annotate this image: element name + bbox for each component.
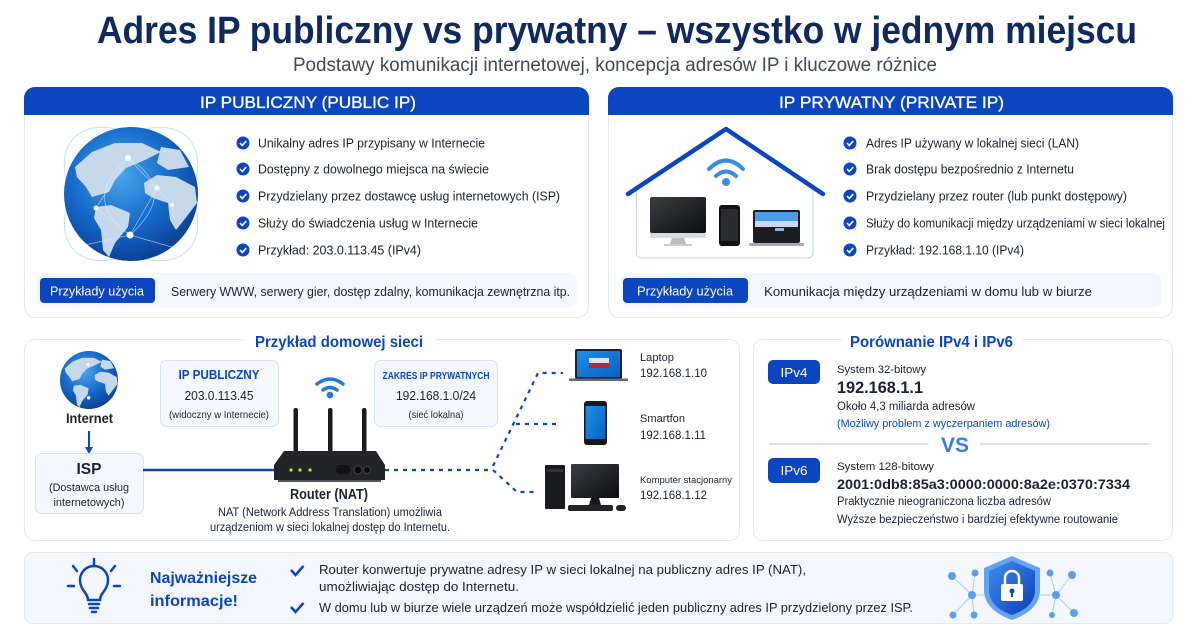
feature list: private IP xyxy=(844,136,1165,258)
feature list: public IP: Służy do świadczenia usług w Internecie xyxy=(258,216,478,230)
device label: desktop: Komputer stacjonarny xyxy=(640,475,732,486)
box: private IP range: ZAKRES IP PRYWATNYCH xyxy=(382,371,490,382)
usage strip: private IP xyxy=(620,273,1162,308)
panel: IPv4 vs IPv6 comparison xyxy=(754,334,1172,540)
device label: smartphone xyxy=(640,413,706,442)
feature list: public IP xyxy=(236,136,560,258)
icon: house with devices xyxy=(628,129,823,258)
text: IPv4 details xyxy=(837,364,1050,430)
arrow: Internet to ISP xyxy=(85,431,93,454)
device label: smartphone: 192.168.1.11 xyxy=(640,428,706,442)
box: ISP xyxy=(36,454,144,514)
feature list: private IP: Brak dostępu bezpośrednio z Internetu xyxy=(866,162,1074,176)
feature list: private IP: Przykład: 192.168.1.10 (IPv4) xyxy=(866,244,1024,258)
panel: private IP xyxy=(608,87,1173,318)
connection: ISP to router xyxy=(143,469,274,471)
device label: laptop xyxy=(640,352,707,380)
subtitle: Podstawy komunikacji internetowej, koncepcja adresów IP i kluczowe różnice xyxy=(293,55,937,76)
panel header: private IP: IP PRYWATNY (PRIVATE IP) xyxy=(779,93,1004,112)
label: router NAT: Router (NAT) xyxy=(290,487,368,503)
text: NAT description: urządzeniom w sieci lokalnej dostęp do Internetu. xyxy=(210,522,450,534)
key points: Router konwertuje prywatne adresy IP w sieci lokalnej na publiczny adres IP (NAT), xyxy=(319,563,806,577)
heading: comparison: Porównanie IPv4 i IPv6 xyxy=(850,334,1013,351)
icon: desktop computer xyxy=(545,464,626,511)
key points xyxy=(291,563,913,615)
box: public IP: 203.0.113.45 xyxy=(184,389,254,403)
box: public IP xyxy=(160,360,278,426)
connections: router to devices xyxy=(385,373,563,492)
text: IPv4 details: Około 4,3 miliarda adresów xyxy=(837,401,976,413)
icon: smartphone xyxy=(584,401,607,445)
icon: laptop xyxy=(749,210,804,246)
text: IPv6 details: Wyższe bezpieczeństwo i bardziej efektywne routowanie xyxy=(837,514,1118,526)
text: IPv4 details: (Możliwy problem z wyczerpaniem adresów) xyxy=(837,418,1050,430)
text: IPv6 details: 2001:0db8:85a3:0000:0000:8a2e:0370:7334 xyxy=(837,476,1130,492)
panel: public IP xyxy=(24,87,589,318)
label: Internet: Internet xyxy=(66,411,113,426)
key points: W domu lub w biurze wiele urządzeń może współdzielić jeden publiczny adres IP przydzielony przez ISP. xyxy=(319,601,913,615)
panel header: public IP xyxy=(24,87,589,115)
text: IPv4 details: 192.168.1.1 xyxy=(837,379,923,397)
box: ISP: internetowych) xyxy=(54,497,124,509)
text: IPv4 details: System 32-bitowy xyxy=(837,364,927,376)
key points: umożliwiając dostęp do Internetu. xyxy=(319,580,519,594)
box: public IP: (widoczny w Internecie) xyxy=(169,409,269,421)
feature list: private IP: Adres IP używany w lokalnej sieci (LAN) xyxy=(866,136,1079,150)
device label: desktop: 192.168.1.12 xyxy=(640,488,707,502)
feature list: private IP: Służy do komunikacji między urządzeniami w sieci lokalnej xyxy=(866,216,1165,230)
box: private IP range xyxy=(374,360,498,426)
divider: VS: VS xyxy=(941,434,969,457)
panel: home network example xyxy=(24,334,740,540)
panel header: public IP: IP PUBLICZNY (PUBLIC IP) xyxy=(200,93,416,112)
title: Adres IP publiczny vs prywatny – wszystko w jednym miejscu xyxy=(97,10,1137,52)
badge: IPv6 xyxy=(768,458,820,483)
text: NAT description xyxy=(210,507,450,534)
icon: router xyxy=(274,408,385,482)
usage strip: public IP: Serwery WWW, serwery gier, dostęp zdalny, komunikacja zewnętrzna itp. xyxy=(171,284,570,299)
text: IPv6 details: System 128-bitowy xyxy=(837,461,935,473)
box: private IP range: (sieć lokalna) xyxy=(408,409,464,421)
device label: laptop: 192.168.1.10 xyxy=(640,366,707,380)
badge: IPv6: IPv6 xyxy=(780,463,808,478)
device label: laptop: Laptop xyxy=(640,352,674,364)
panel: key information xyxy=(24,552,1172,624)
text: NAT description: NAT (Network Address Translation) umożliwia xyxy=(218,507,443,519)
heading: key information xyxy=(150,570,257,610)
icon: network nodes and security shield xyxy=(948,556,1078,620)
badge: IPv4 xyxy=(768,360,820,384)
feature list: public IP: Przydzielany przez dostawcę usług internetowych (ISP) xyxy=(258,190,560,204)
box: ISP: ISP xyxy=(77,461,101,478)
device label: smartphone: Smartfon xyxy=(640,413,685,425)
heading: home network: Przykład domowej sieci xyxy=(255,334,423,351)
icon: globe xyxy=(39,102,223,286)
usage strip: public IP xyxy=(36,273,577,308)
feature list: public IP: Przykład: 203.0.113.45 (IPv4) xyxy=(258,244,421,258)
icon: phone xyxy=(719,205,740,246)
usage strip: private IP: Komunikacja między urządzeniami w domu lub w biurze xyxy=(764,284,1092,299)
box: public IP: IP PUBLICZNY xyxy=(178,368,260,382)
device label: desktop xyxy=(640,475,732,502)
panel header: private IP xyxy=(608,87,1173,115)
heading: key information: Najważniejsze xyxy=(150,570,257,587)
icon: laptop xyxy=(569,349,628,381)
box: ISP: (Dostawca usług xyxy=(49,482,129,494)
icon: router wifi xyxy=(317,379,343,397)
text: IPv6 details: Praktycznie nieograniczona liczba adresów xyxy=(837,496,1052,508)
feature list: private IP: Przydzielany przez router (lub punkt dostępowy) xyxy=(866,190,1127,204)
usage strip: public IP: Przykłady użycia xyxy=(50,284,145,298)
badge: IPv4: IPv4 xyxy=(780,365,808,380)
icon: wifi xyxy=(709,160,743,184)
icon: small globe xyxy=(60,351,118,409)
heading: key information: informacje! xyxy=(150,593,238,610)
feature list: public IP: Unikalny adres IP przypisany w Internecie xyxy=(258,136,485,150)
feature list: public IP: Dostępny z dowolnego miejsca na świecie xyxy=(258,162,489,176)
icon: light bulb xyxy=(68,559,120,612)
text: IPv6 details xyxy=(837,461,1130,526)
icon: desktop monitor xyxy=(650,197,706,246)
box: private IP range: 192.168.1.0/24 xyxy=(396,389,476,403)
usage strip: private IP: Przykłady użycia xyxy=(637,284,734,298)
